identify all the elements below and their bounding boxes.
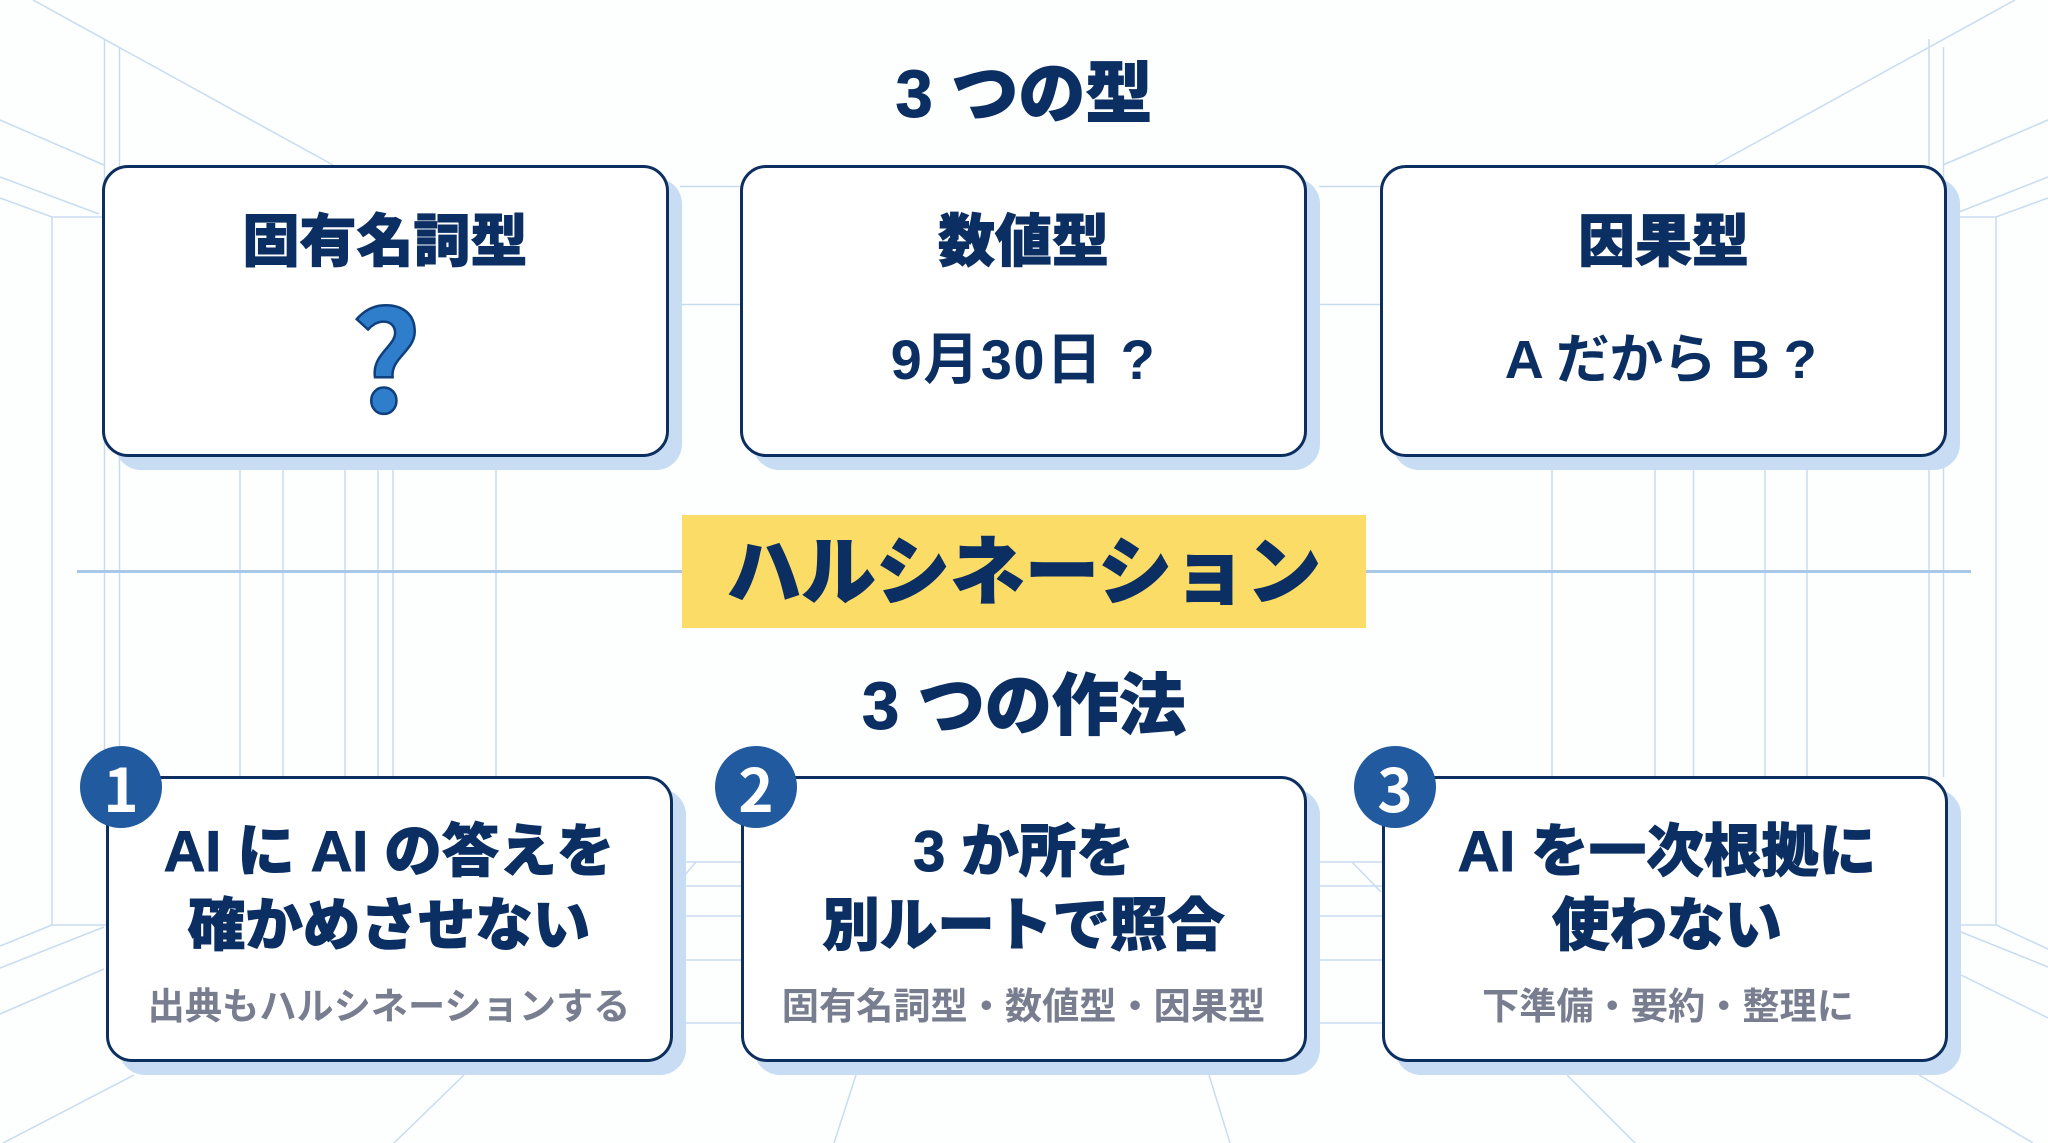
icon: question mark: ? xyxy=(350,252,421,452)
banner: ハルシネーション xyxy=(682,515,1366,628)
badge: number 1 xyxy=(80,746,162,828)
heading: AIを一次根拠に使わない xyxy=(1458,820,1876,958)
badge: number 3 xyxy=(1354,746,1436,828)
panel: 作法2 xyxy=(715,743,1320,1075)
badge: number 3: 3 xyxy=(1377,743,1413,830)
card body with texts xyxy=(740,776,1307,1062)
panel: 固有名詞型 xyxy=(102,165,668,457)
badge: number 1: 1 xyxy=(103,743,139,830)
card body with texts xyxy=(1382,776,1948,1062)
title: 3つの型: 3 つの型 xyxy=(896,57,1152,132)
badge: number 2 xyxy=(715,746,797,828)
heading: AIにAIの答えを確かめさせない xyxy=(164,820,614,958)
example text: 9月30日?: 9月30日 ? xyxy=(891,328,1156,391)
note: 出典もハルシネーションする: 出典もハルシネーションする xyxy=(148,985,630,1027)
note: 下準備・要約・整理に: 下準備・要約・整理に xyxy=(1482,985,1854,1027)
heading: 固有名詞型: 固有名詞型 xyxy=(242,210,528,274)
heading: AIにAIの答えを確かめさせない: AI に AI の答えを xyxy=(164,820,614,884)
panel: 数値型 xyxy=(740,165,1307,457)
heading: AIにAIの答えを確かめさせない: 確かめさせない xyxy=(188,894,590,958)
panel: 因果型 xyxy=(1380,165,1947,457)
heading: AIを一次根拠に使わない: 使わない xyxy=(1552,894,1782,958)
example text: AだからB?: A だから B ? xyxy=(1505,330,1816,390)
card body with texts xyxy=(106,776,672,1062)
heading: 3か所を別ルートで照合: 別ルートで照合 xyxy=(822,894,1225,958)
heading: AIを一次根拠に使わない: AI を一次根拠に xyxy=(1458,820,1876,884)
heading: 因果型: 因果型 xyxy=(1578,210,1749,274)
note: 固有名詞型・数値型・因果型: 固有名詞型・数値型・因果型 xyxy=(782,985,1265,1027)
title: 3つの作法: 3 つの作法 xyxy=(862,669,1186,744)
heading: 数値型: 数値型 xyxy=(938,210,1109,274)
banner text: ハルシネーション xyxy=(727,531,1321,614)
heading: 3か所を別ルートで照合 xyxy=(822,820,1225,958)
heading: 3か所を別ルートで照合: 3 か所を xyxy=(913,820,1134,884)
divider line behind banner xyxy=(77,570,1971,573)
panel: 作法1 xyxy=(80,743,686,1075)
panel: 作法3 xyxy=(1354,743,1961,1075)
badge: number 2: 2 xyxy=(738,743,774,830)
